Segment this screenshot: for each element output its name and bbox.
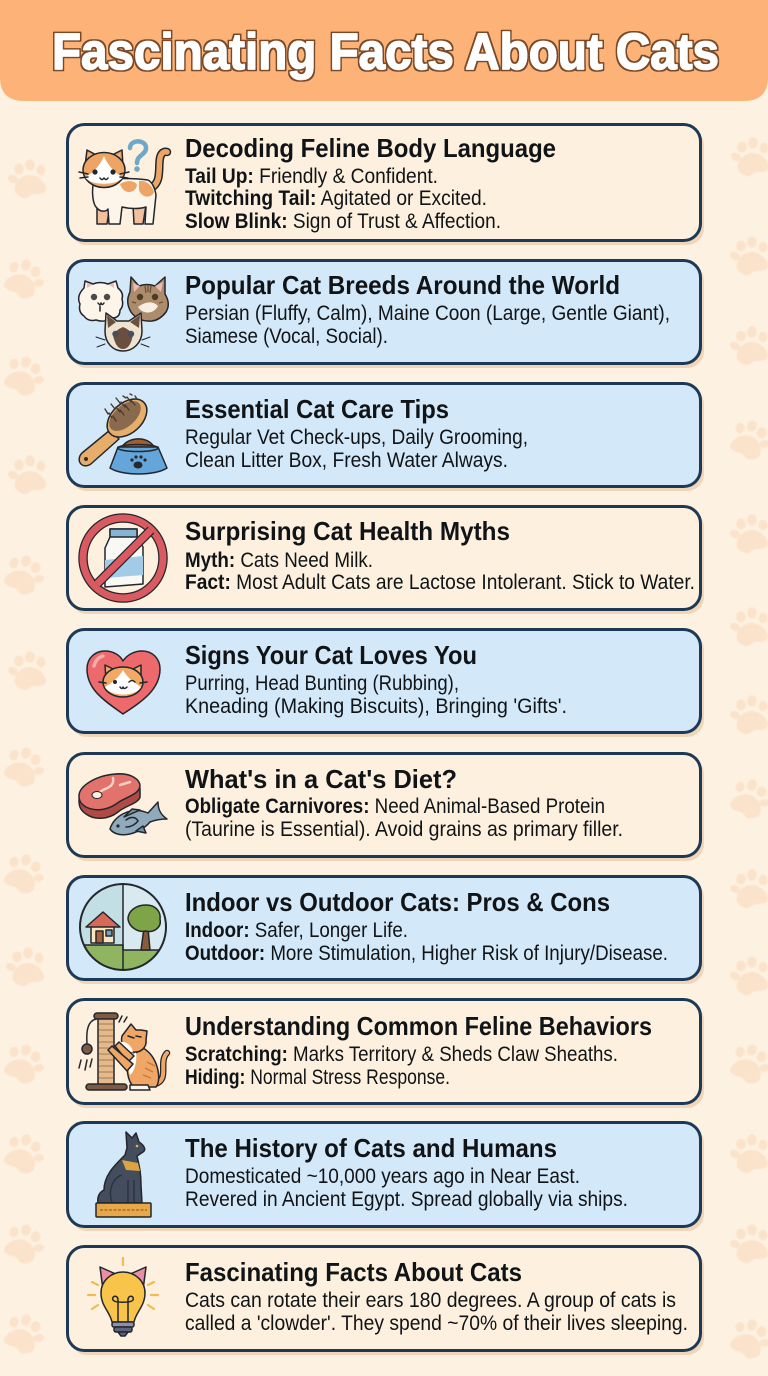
text: care list (185, 426, 528, 472)
heading: Fascinating Facts About Cats (185, 1257, 522, 1287)
icon: Egyptian cat statue (96, 1132, 151, 1217)
panel: signs of love (68, 630, 704, 737)
heading: Indoor vs Outdoor Cats: Pros & Cons (185, 887, 610, 917)
text: tail and blink signals: Slow Blink: Sign of Trust & Affection. (185, 210, 501, 233)
text: care list: Clean Litter Box, Fresh Water Always. (185, 449, 508, 472)
heading: Understanding Common Feline Behaviors (185, 1011, 652, 1041)
heading: Decoding Feline Body Language (185, 133, 556, 163)
icon: steak and fish (79, 774, 167, 835)
text: cat facts: called a 'clowder'. They spend ~70% of their lives sleeping. (185, 1312, 688, 1335)
text: love signs: Purring, Head Bunting (Rubbing), (185, 672, 459, 695)
text: breed list: Siamese (Vocal, Social). (185, 325, 388, 348)
text: history notes: Domesticated ~10,000 years ago in Near East. (185, 1165, 580, 1188)
icon: cat with question mark (79, 141, 167, 224)
text: behavior notes: Hiding: Normal Stress Response. (185, 1066, 450, 1089)
header banner (0, 0, 768, 101)
panel: behaviors (68, 1000, 704, 1108)
text: pros and cons: Indoor: Safer, Longer Life. (185, 919, 408, 942)
icon: house and tree in split circle (80, 884, 166, 971)
title: Fascinating Facts About Cats (52, 23, 719, 80)
panel: health myths (68, 506, 704, 614)
text: history notes (185, 1165, 628, 1211)
text: cat facts: Cats can rotate their ears 180 degrees. A group of cats is (185, 1289, 676, 1312)
text: care list: Regular Vet Check-ups, Daily Grooming, (185, 426, 528, 449)
text: diet details: Obligate Carnivores: Need Animal-Based Protein (185, 795, 605, 818)
text: pros and cons (185, 919, 668, 965)
icon: three cat breeds (79, 277, 168, 351)
panel: diet (68, 754, 704, 861)
icon: heart with cat face (87, 651, 160, 714)
text: behavior notes: Scratching: Marks Territory & Sheds Claw Sheaths. (185, 1043, 618, 1066)
panel: care tips (68, 384, 704, 491)
heading: Surprising Cat Health Myths (185, 516, 510, 546)
text: diet details (185, 795, 623, 841)
icon: crossed-out milk carton (83, 518, 163, 598)
text: tail and blink signals (185, 165, 501, 233)
heading: What's in a Cat's Diet? (185, 764, 457, 794)
heading: Essential Cat Care Tips (185, 394, 449, 424)
panel: body language (68, 124, 704, 245)
panel: fascinating facts (68, 1246, 704, 1355)
text: tail and blink signals: Tail Up: Friendly & Confident. (185, 165, 438, 188)
text: myth and fact (185, 549, 695, 594)
text: myth and fact: Fact: Most Adult Cats are Lactose Intolerant. Stick to Water. (185, 571, 695, 594)
text: behavior notes (185, 1043, 618, 1089)
panel: indoor vs outdoor (68, 876, 704, 984)
text: love signs: Kneading (Making Biscuits), Bringing 'Gifts'. (185, 695, 567, 718)
panel: history (68, 1122, 704, 1231)
text: history notes: Revered in Ancient Egypt. Spread globally via ships. (185, 1188, 628, 1211)
heading: Popular Cat Breeds Around the World (185, 270, 620, 300)
text: love signs (185, 672, 567, 718)
heading: The History of Cats and Humans (185, 1133, 557, 1163)
heading: Signs Your Cat Loves You (185, 640, 477, 670)
text: breed list: Persian (Fluffy, Calm), Maine Coon (Large, Gentle Giant), (185, 302, 670, 325)
icon: cat-eared light bulb (88, 1258, 158, 1336)
icon: brush and bowl (79, 391, 167, 474)
text: diet details: (Taurine is Essential). Avoid grains as primary filler. (185, 818, 623, 841)
text: cat facts (185, 1289, 688, 1335)
panel: breeds (68, 260, 704, 368)
icon: cat at scratching post (79, 1013, 167, 1090)
text: myth and fact: Myth: Cats Need Milk. (185, 549, 373, 572)
text: tail and blink signals: Twitching Tail: Agitated or Excited. (185, 187, 487, 210)
text: breed list (185, 302, 670, 348)
text: pros and cons: Outdoor: More Stimulation, Higher Risk of Injury/Disease. (185, 942, 668, 965)
